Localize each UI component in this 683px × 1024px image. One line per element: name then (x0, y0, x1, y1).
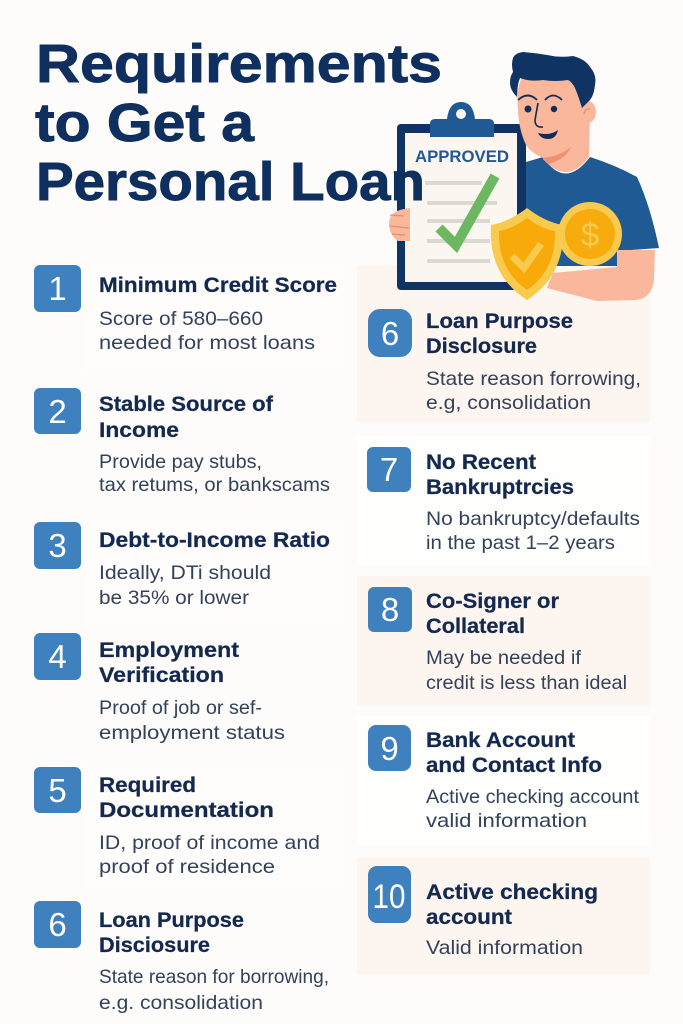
item 9: bank account and contact info: Bank Account (426, 729, 575, 752)
neck (543, 112, 590, 172)
item 5: required documentation: proof of residence (99, 856, 275, 878)
title: to Get a (35, 93, 255, 153)
item 6 left: loan purpose disclosure (34, 901, 329, 1014)
item 5: required documentation: Documentation (99, 799, 274, 822)
item 6 right: loan purpose disclosure: 6 (381, 315, 399, 352)
item 4: employment verification: 4 (48, 638, 67, 675)
item 3: debt-to-income ratio: be 35% or lower (99, 587, 250, 609)
item 6 left: loan purpose disclosure: State reason for borrowing, (99, 966, 329, 988)
green check mark (439, 176, 495, 245)
item 5: required documentation: Required (99, 774, 196, 797)
item 1: minimum credit score: Score of 580–660 (99, 308, 263, 330)
item 7: no recent bankruptcies: Bankruptrcies (426, 476, 574, 499)
item 10: active checking account: Active checking (426, 881, 598, 904)
item 2: stable source of income (34, 388, 330, 496)
item 3: debt-to-income ratio (34, 522, 330, 609)
item 10: active checking account: account (426, 906, 512, 929)
item 8: co-signer or collateral: Co-Signer or (426, 590, 559, 613)
item 4: employment verification: Verification (99, 664, 224, 687)
item 1: minimum credit score (34, 265, 337, 354)
coin (558, 202, 622, 266)
item 8: co-signer or collateral: Collateral (426, 615, 525, 638)
item 4: employment verification: employment status (99, 722, 285, 744)
hand (389, 208, 410, 241)
ear (580, 101, 596, 123)
item 3: debt-to-income ratio: Ideally, DTi should (99, 562, 271, 584)
panel: right item 8 background (357, 576, 650, 706)
item 7: no recent bankruptcies (367, 447, 640, 554)
item 2: stable source of income: Stable Source of (99, 393, 274, 416)
item 3: debt-to-income ratio: Debt-to-Income Ratio (99, 529, 330, 552)
item 4: employment verification (34, 633, 285, 744)
item 4: employment verification: Proof of job or sef- (99, 697, 262, 719)
item 7: no recent bankruptcies: No bankruptcy/defaults (426, 508, 640, 530)
clipboard (397, 102, 526, 290)
face (517, 76, 585, 158)
item 9: bank account and contact info: 9 (380, 730, 399, 767)
eyes, brows, nose and mouth (524, 106, 532, 112)
title (35, 34, 442, 212)
item 7: no recent bankruptcies: 7 (380, 451, 398, 488)
title: Personal Loan (36, 152, 425, 212)
item 6 right: loan purpose disclosure: e.g, consolidation (426, 392, 591, 414)
arm (547, 250, 655, 301)
item 8: co-signer or collateral: 8 (381, 591, 399, 628)
item 4: employment verification: Employment (99, 639, 239, 662)
item 3: debt-to-income ratio: 3 (48, 527, 67, 564)
item 1: minimum credit score: 1 (48, 270, 67, 307)
clipboard clip (430, 102, 494, 137)
item 2: stable source of income: Provide pay stubs, (99, 451, 262, 473)
item 6 left: loan purpose disclosure: 6 (48, 906, 67, 943)
item 10: active checking account (368, 866, 598, 959)
item 9: bank account and contact info: valid information (426, 810, 587, 832)
item 8: co-signer or collateral: May be needed if (426, 647, 582, 669)
item 7: no recent bankruptcies: in the past 1–2 years (426, 532, 615, 554)
title: Requirements (36, 34, 442, 94)
item 6 right: loan purpose disclosure: Loan Purpose (426, 310, 573, 333)
item 1: minimum credit score: needed for most loans (99, 332, 315, 354)
neck shadow (543, 147, 571, 164)
item 9: bank account and contact info (368, 725, 640, 832)
item 8: co-signer or collateral: credit is less than ideal (426, 672, 627, 694)
shirt (526, 157, 659, 266)
illustration: man holding approved clipboard (389, 52, 659, 301)
item 2: stable source of income: tax retums, or bankscams (99, 474, 330, 496)
item 2: stable source of income: Income (99, 419, 179, 442)
item 6 right: loan purpose disclosure: Disclosure (426, 335, 537, 358)
item 6 left: loan purpose disclosure: e.g. consolidation (99, 992, 263, 1014)
item 2: stable source of income: 2 (48, 393, 67, 430)
item 5: required documentation: ID, proof of income and (99, 832, 320, 854)
item 7: no recent bankruptcies: No Recent (426, 451, 536, 474)
item 10: active checking account: Valid information (426, 937, 583, 959)
item 8: co-signer or collateral (368, 587, 627, 694)
item 1: minimum credit score: Minimum Credit Score (99, 274, 337, 297)
coin: $ (581, 216, 599, 253)
hair (510, 52, 595, 108)
item 6 left: loan purpose disclosure: Disciosure (99, 934, 210, 957)
item 6 left: loan purpose disclosure: Loan Purpose (99, 909, 244, 932)
item 9: bank account and contact info: Active checking account (426, 786, 640, 808)
item 6 right: loan purpose disclosure: State reason forrowing, (426, 368, 641, 390)
panel: right item 10 background (357, 857, 650, 975)
item 10: active checking account: 10 (372, 878, 406, 916)
shield (491, 208, 563, 300)
panel: right item 6 background (357, 265, 650, 422)
approved stamp text: APPROVED (415, 147, 509, 166)
item 5: required documentation (34, 767, 320, 878)
item 5: required documentation: 5 (48, 772, 67, 809)
item 6 right: loan purpose disclosure (368, 309, 641, 414)
form lines (425, 181, 497, 263)
item 9: bank account and contact info: and Contact Info (426, 754, 602, 777)
